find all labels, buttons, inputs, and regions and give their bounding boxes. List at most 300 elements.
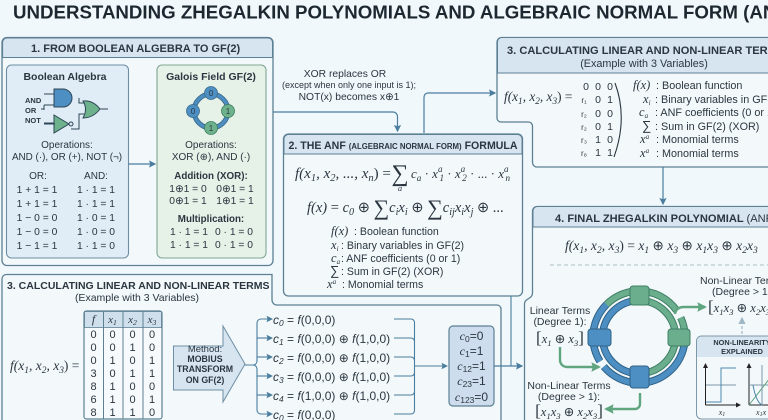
coefficient equations: c: [273, 332, 279, 346]
formula 1: a: [438, 164, 443, 174]
final formula: x: [706, 238, 713, 253]
label: non-linear terms right: 1: [719, 307, 724, 317]
formula 2: ⊕: [408, 200, 427, 216]
legend: i: [337, 245, 339, 253]
label: non-linear terms bottom: [x: [535, 401, 546, 420]
formula 1: x: [498, 166, 504, 181]
panel: non-linearity explained: x: [762, 408, 767, 417]
panel: non-linearity explained: [696, 336, 768, 419]
legend: : Binary variables in GF(2): [341, 240, 464, 252]
truth table: [84, 311, 162, 419]
formula 2: x: [454, 200, 462, 216]
panel: non-linearity explained: EXPLAINED: [721, 347, 763, 356]
results box: c: [455, 390, 461, 404]
coefficient equations: f(0,0,0) ⊕ f(1,0,0): [297, 370, 390, 384]
final formula: 2: [597, 246, 602, 256]
label: non-linear terms right: x: [750, 301, 756, 315]
arrow: panel 3 to panel 4: [662, 167, 664, 204]
coefficient equations: =: [284, 351, 297, 365]
truth table: f: [92, 312, 97, 326]
label: non-linear terms right: x: [759, 301, 766, 315]
arrow: non-linear right: [675, 307, 705, 314]
coefficient equations: 2: [278, 356, 284, 366]
function label bottom: 3: [58, 366, 64, 376]
final formula: x: [696, 238, 702, 253]
results box: =1: [472, 374, 486, 388]
final formula: 1: [702, 246, 707, 256]
tree connectors left: [245, 319, 272, 414]
panel: ANF formula: [284, 134, 522, 296]
panel: Galois field: 0⊕1 = 1: [216, 184, 254, 195]
matrix: 1: [607, 94, 613, 106]
final formula: f(x: [565, 238, 579, 253]
truth table: 0: [90, 342, 97, 354]
matrix: 0: [607, 134, 613, 146]
legend: a: [337, 258, 341, 266]
AND table: 1 · 1 = 1: [77, 185, 115, 196]
OR table: [17, 171, 58, 252]
results box: =0: [474, 390, 488, 404]
AND table: AND:: [84, 171, 108, 182]
results box: c: [457, 359, 463, 373]
matrix: r₂: [581, 123, 587, 132]
chart: step: [706, 364, 740, 405]
legend right: i: [649, 99, 651, 107]
truth table: 1: [109, 355, 116, 367]
panel: Boolean algebra: AND: [25, 96, 42, 105]
final formula: x: [667, 238, 673, 253]
formula 2: i: [405, 207, 408, 218]
arrow: Boolean to GF(2): [128, 163, 155, 165]
truth table: 1: [149, 394, 155, 406]
label: non-linear terms right: [700, 275, 768, 317]
truth table: 3: [152, 318, 157, 327]
truth table: x: [108, 314, 113, 326]
panel: Galois field: 1 · 1 = 1: [170, 240, 208, 251]
formula 2: x: [463, 200, 471, 216]
truth table: 0: [129, 381, 136, 393]
arrow: Mobius transform method: Method:: [188, 344, 222, 355]
truth table: 0: [109, 329, 116, 341]
truth table: 6: [90, 394, 97, 406]
label: linear terms: x: [568, 332, 574, 346]
legend right: a: [646, 147, 650, 155]
coefficient equations: 3: [279, 375, 284, 385]
legend: c: [331, 251, 337, 265]
truth table: 0: [149, 329, 155, 341]
label: linear terms: Linear Terms: [530, 305, 590, 317]
formula 1: ·: [444, 166, 455, 181]
function label bottom: , x: [46, 358, 59, 373]
truth table: 2: [133, 318, 137, 327]
matrix: r₂: [581, 110, 587, 119]
matrix: 0: [595, 94, 601, 106]
final formula: 3: [712, 246, 718, 256]
formula 1: n: [506, 173, 511, 183]
formula 2: i: [461, 207, 464, 218]
formula 2: ∑: [373, 195, 389, 220]
coefficient equations: f(0,0,0) ⊕ f(1,0,0): [297, 332, 390, 346]
formula 1: a: [398, 183, 402, 193]
label: non-linear terms bottom: (Degree > 1):: [538, 391, 600, 403]
label: non-linear terms bottom: x: [577, 405, 583, 419]
final formula: x: [746, 238, 753, 253]
formula 1: 2: [462, 173, 467, 183]
panel: calculating terms, bottom: (Example with 3 Variables): [75, 292, 199, 304]
label: linear terms: [530, 305, 590, 348]
arrow: results to final: [494, 365, 522, 367]
matrix: 0: [607, 81, 613, 93]
connector note: [282, 69, 416, 103]
formula 2: c: [389, 200, 396, 216]
panel: Galois field: [157, 65, 266, 258]
truth table: 3: [90, 368, 97, 380]
coefficient equations: 0: [279, 318, 284, 328]
formula 1: x: [455, 166, 461, 181]
truth table: 1: [109, 407, 116, 419]
coefficient equations: 4: [279, 394, 284, 404]
legend: f(x): [331, 224, 348, 238]
formula 1: ·: [421, 166, 432, 181]
label: non-linear terms bottom: ]: [597, 401, 603, 420]
AND table: 1 · 1 = 0: [77, 241, 115, 252]
truth table: 1: [109, 381, 116, 393]
label: linear terms: 1: [547, 338, 552, 348]
heading 2: 2. THE ANF (ALGEBRAIC NORMAL FORM) FORMULA: [288, 140, 518, 152]
OR table: 1 − 0 = 0: [17, 213, 58, 224]
results box: =1: [472, 359, 486, 373]
matrix: 1: [607, 147, 613, 159]
label: non-linear terms right: [x: [708, 297, 719, 316]
truth table: 1: [149, 368, 155, 380]
formula 2: [307, 195, 504, 220]
formula 2: ⊕ ...: [473, 200, 504, 216]
AND table: [77, 171, 115, 252]
label: non-linear terms bottom: x: [586, 405, 593, 419]
legend right: ∑: [642, 118, 651, 133]
panel: Galois field: 1 · 1 = 1: [170, 227, 208, 238]
formula 1: ∑: [391, 161, 409, 187]
final formula: 1: [644, 246, 649, 256]
legend: : ANF coefficients (0 or 1): [341, 253, 460, 265]
panel: Galois field: Galois Field GF(2): [166, 71, 256, 83]
OR table: 1 − 0 = 0: [17, 227, 58, 238]
matrix: r₁: [581, 96, 587, 105]
formula 2: ij: [449, 207, 455, 218]
legend: x: [326, 277, 333, 291]
legend: [326, 224, 464, 291]
truth table: 0: [129, 329, 136, 341]
formula 2: c: [443, 200, 450, 216]
truth table: 0: [129, 394, 136, 406]
truth table: 8: [90, 407, 97, 419]
panel: Galois field: XOR (⊕), AND (·): [172, 152, 250, 163]
label: non-linear terms right: x: [723, 301, 730, 315]
arrow: dashed explanation: [741, 318, 743, 334]
coefficient equations: =: [284, 313, 297, 327]
panel: Boolean algebra: NOT: [25, 116, 41, 125]
panel: non-linearity explained: 1: [760, 412, 763, 418]
AND table: 1 · 0 = 0: [77, 227, 115, 238]
function label bottom: ) =: [64, 358, 79, 373]
formula 2: ⊕: [354, 200, 373, 216]
legend: : Monomial terms: [342, 279, 423, 291]
formula 2: 0: [349, 207, 354, 218]
label: non-linear terms right: 3: [728, 307, 734, 317]
formula 1: 1: [311, 173, 316, 184]
results box: 0: [465, 334, 470, 344]
panel: from Boolean algebra to GF(2): [2, 38, 273, 266]
final formula: , x: [584, 238, 597, 253]
results box: [449, 326, 494, 406]
heading 3 bottom: 3. CALCULATING LINEAR AND NON-LINEAR TERMS: [7, 280, 270, 292]
truth table: x: [148, 314, 153, 326]
connector note: NOT(x) becomes x⊕1: [299, 92, 400, 103]
function label: , x: [540, 89, 553, 104]
matrix: [581, 81, 621, 159]
final formula: , x: [602, 238, 615, 253]
truth table: 0: [149, 342, 155, 354]
formula 1: [295, 161, 511, 193]
icon: GF ring: [186, 86, 234, 134]
formula 1: 1: [440, 173, 444, 183]
formula 1: a: [461, 164, 466, 174]
panel: Galois field: Operations:: [185, 140, 237, 151]
label: non-linear terms bottom: Non-Linear Terms: [527, 380, 611, 392]
truth table: 1: [149, 355, 155, 367]
legend: ∑: [330, 263, 339, 278]
bracket right: [394, 319, 447, 414]
matrix: 1: [607, 121, 613, 133]
final formula: x: [736, 238, 742, 253]
results box: 23: [463, 379, 472, 389]
matrix: 1: [595, 147, 601, 159]
final formula: 3: [752, 246, 758, 256]
label: non-linear terms bottom: ⊕: [561, 405, 577, 419]
legend: x: [330, 238, 337, 252]
formula 2: ∑: [427, 195, 443, 220]
panel: non-linearity explained: x: [756, 408, 760, 417]
truth table: 1: [129, 342, 136, 354]
legend right: a: [645, 112, 649, 120]
panel: calculating terms, top right: (Example with 3 Variables): [580, 58, 708, 70]
coefficient equations: c: [273, 313, 279, 327]
panel: calculating terms, bottom: [2, 274, 522, 420]
matrix: 0: [583, 81, 589, 93]
panel: Boolean algebra: Boolean Algebra: [23, 71, 107, 83]
OR table: OR:: [29, 171, 47, 182]
icon: GF ring: 0: [191, 107, 196, 116]
coefficient equations: =: [284, 332, 297, 346]
legend right: f(x): [633, 78, 650, 92]
coefficient equations: [273, 313, 390, 420]
formula 1: x: [432, 166, 438, 181]
truth table: 0: [129, 355, 136, 367]
panel: Galois field: 1⊕1 = 0: [169, 184, 207, 195]
heading 1: 1. FROM BOOLEAN ALGEBRA TO GF(2): [31, 43, 241, 55]
formula 2: f(x) = c: [307, 200, 349, 216]
legend: : Sum in GF(2) (XOR): [341, 266, 443, 278]
chart: overlap: [749, 364, 768, 405]
formula 1: a: [504, 164, 509, 174]
formula 1: 2: [330, 173, 336, 184]
coefficient equations: f(0,0,0) ⊕ f(1,0,0): [297, 351, 390, 365]
legend right: a: [646, 133, 650, 141]
coefficient equations: f(1,0,0) ⊕ f(1,0,0): [297, 389, 390, 403]
coefficient equations: f(0,0,0): [297, 313, 335, 327]
AND table: 1 · 0 = 1: [77, 213, 115, 224]
results box: c: [460, 329, 466, 343]
panel: Galois field: Multiplication:: [178, 214, 244, 225]
formula 2: j: [469, 207, 474, 218]
formula 2: x: [397, 200, 405, 216]
function label: , x: [523, 89, 535, 104]
icon: GF ring: 1: [209, 124, 214, 133]
matrix: 0: [595, 108, 601, 120]
formula 1: ) =: [374, 166, 391, 182]
panel: Galois field: 0 · 1 = 0: [215, 227, 253, 238]
coefficient equations: c: [273, 370, 279, 384]
function label: ) =: [557, 89, 572, 104]
panel: Boolean algebra: [6, 65, 128, 258]
arrow: non-linear bottom: [606, 393, 640, 409]
legend right: : Sum in GF(2) (XOR): [655, 121, 759, 133]
panel: Galois field: 0 · 1 = 0: [215, 240, 253, 251]
final formula: ) =: [619, 238, 638, 254]
results box: 12: [463, 364, 472, 374]
matrix: 1: [595, 134, 601, 146]
icon: logic gates: [41, 89, 108, 133]
final formula: 1: [579, 246, 584, 256]
results box: 123: [460, 395, 475, 405]
legend right: [633, 78, 768, 160]
matrix: 0: [595, 121, 601, 133]
panel: Galois field: 0⊕1 = 1: [169, 196, 207, 207]
label: linear terms: ]: [578, 328, 584, 347]
matrix: r₈: [581, 149, 587, 158]
label: linear terms: ⊕: [552, 332, 568, 346]
truth table: 0: [90, 355, 97, 367]
function label: 3: [551, 97, 557, 107]
results box: 1: [465, 349, 470, 359]
legend right: x: [639, 132, 646, 146]
function label: f(x: [504, 89, 518, 104]
formula 1: f(x: [295, 166, 311, 182]
connector note: XOR replaces OR: [304, 69, 386, 80]
results box: =0: [470, 329, 484, 343]
legend right: : Monomial terms: [656, 134, 739, 146]
formula 1: c: [411, 166, 417, 181]
legend right: x: [639, 146, 646, 160]
function label bottom: 2: [42, 366, 47, 376]
icon: GF ring: 1: [226, 107, 231, 116]
final formula: 3: [614, 246, 620, 256]
label: non-linear terms right: ⊕: [734, 301, 750, 315]
arrow: Mobius transform method: TRANSFORM: [177, 364, 233, 374]
legend right: : Monomial terms: [656, 148, 739, 160]
panel: non-linearity explained: x: [719, 408, 722, 417]
label: linear terms: 3: [573, 338, 579, 348]
function label: 2: [535, 97, 540, 107]
truth table: 0: [109, 368, 116, 380]
coefficient equations: 1: [279, 337, 284, 347]
label: non-linear terms bottom: [527, 380, 611, 420]
truth table: 8: [90, 381, 97, 393]
results box: c: [460, 344, 466, 358]
coefficient equations: =: [284, 389, 297, 403]
final formula: x: [638, 238, 644, 253]
OR table: 1 − 1 = 1: [17, 241, 58, 252]
formula 1: · ... ·: [467, 166, 498, 181]
panel: final polynomial: [524, 206, 768, 420]
OR table: 1 + 1 = 1: [17, 199, 58, 210]
AND table: 1 · 1 = 1: [77, 199, 115, 210]
final formula: 2: [742, 246, 747, 256]
final formula: ⊕: [649, 238, 667, 253]
final formula: 3: [672, 246, 678, 256]
final formula: ⊕: [678, 238, 696, 253]
legend right: c: [639, 105, 645, 119]
truth table: 1: [113, 318, 117, 327]
arrow: Mobius transform method: [174, 326, 245, 402]
panel: Boolean algebra: AND (·), OR (+), NOT (¬): [12, 152, 122, 163]
arrow: Mobius transform method: MOBIUS: [187, 354, 223, 364]
label: non-linear terms right: 2: [756, 307, 761, 317]
panel: calculating terms, top right: [497, 38, 768, 167]
legend: : Boolean function: [354, 226, 439, 238]
arrow: panel 1 to panel 2: [273, 112, 398, 131]
coefficient equations: c: [273, 351, 279, 365]
truth table: 0: [109, 342, 116, 354]
function label bottom: 1: [24, 366, 29, 376]
truth table: 1: [129, 368, 136, 380]
truth table: 1: [109, 394, 116, 406]
function label bottom: , x: [29, 358, 42, 373]
legend: a: [333, 278, 337, 286]
formula 1: n: [368, 173, 374, 184]
panel: Galois field: 1⊕1 = 1: [216, 196, 254, 207]
panel: Boolean algebra: OR: [25, 106, 37, 115]
icon: GF ring: 0: [209, 89, 214, 98]
truth table: x: [128, 314, 133, 326]
coefficient equations: =: [284, 370, 297, 384]
matrix: 0: [607, 108, 613, 120]
formula 1: , x: [316, 166, 331, 182]
truth table: 0: [149, 407, 155, 419]
legend right: : Boolean function: [656, 80, 742, 92]
OR table: 1 + 1 = 1: [17, 185, 58, 196]
formula 2: i: [396, 207, 399, 218]
arrow: Mobius transform method: ON GF(2): [186, 375, 224, 385]
icon: polynomial ring: [588, 286, 690, 388]
results box: c: [457, 374, 463, 388]
label: non-linear terms bottom: x: [550, 405, 557, 419]
results box: =1: [470, 344, 484, 358]
matrix: 0: [595, 81, 601, 93]
label: linear terms: (Degree 1):: [533, 316, 587, 328]
formula 1: a: [417, 173, 422, 183]
connector note: (except when only one input is 1);: [282, 80, 416, 90]
panel: Galois field: Addition (XOR):: [174, 171, 248, 182]
label: linear terms: [x: [536, 328, 547, 347]
final formula: ⊕: [718, 238, 736, 253]
truth table: 0: [149, 381, 155, 393]
formula 1: , ..., x: [336, 166, 369, 182]
truth table: 1: [129, 407, 136, 419]
coefficient equations: c: [273, 389, 279, 403]
function label bottom: f(x: [10, 358, 24, 373]
panel: Boolean algebra: Operations:: [41, 140, 93, 151]
